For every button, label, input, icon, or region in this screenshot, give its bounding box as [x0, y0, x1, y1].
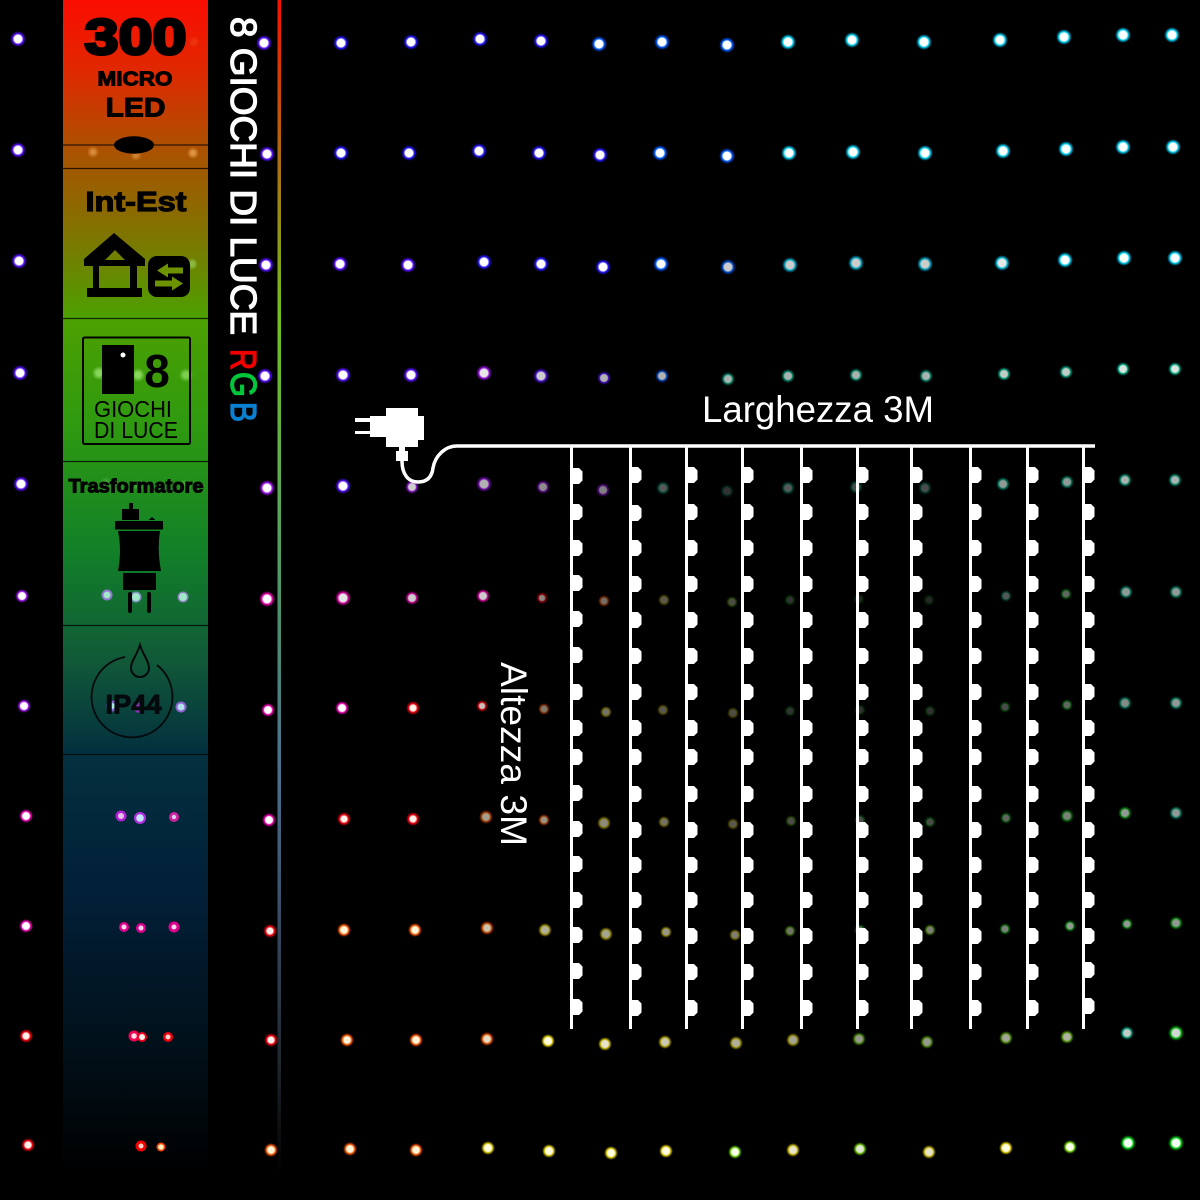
panel: features sidebar: [63, 0, 208, 1200]
icon: 8 light modes box: 8: [144, 345, 170, 397]
strands: [570, 446, 1085, 1029]
icon: micro LED: [114, 136, 154, 154]
icon: 8 light modes box: DI LUCE: [94, 417, 178, 443]
icon: transformer: [115, 503, 163, 613]
icon: IP44 water drop badge: [92, 645, 173, 737]
cable: [402, 446, 1095, 482]
label: Trasformatore: Trasformatore: [68, 476, 204, 498]
icon: 8 light modes box: [83, 338, 190, 444]
section dividers: [63, 145, 208, 754]
strand bulbs: [571, 467, 1094, 1016]
icon: plug adapter: [355, 408, 424, 461]
heading: 300 micro LED: [84, 9, 186, 122]
label: Int-Est: Int-Est: [86, 186, 186, 217]
icon: 8 light modes box: GIOCHI: [94, 396, 172, 422]
vertical title: 8 giochi di luce RGB: G: [223, 372, 264, 397]
curtain diagram: [355, 389, 1095, 1029]
icon: house indoor outdoor: [84, 233, 190, 297]
vertical title: 8 giochi di luce RGB: 8 GIOCHI DI LUCE: [223, 17, 264, 335]
label: height: Altezza 3M: [493, 662, 534, 846]
vertical gradient line: [278, 0, 281, 1175]
heading: 300 micro LED: MICRO: [98, 68, 172, 90]
heading: 300 micro LED: LED: [106, 92, 166, 122]
LEDs showing through sidebar: [87, 36, 200, 1152]
vertical title: 8 giochi di luce RGB: B: [223, 402, 264, 422]
heading: 300 micro LED: 300: [84, 9, 186, 65]
label: width: Larghezza 3M: [702, 389, 934, 430]
vertical title: 8 giochi di luce RGB: R: [223, 349, 264, 370]
icon: IP44 water drop badge: IP44: [106, 690, 162, 720]
